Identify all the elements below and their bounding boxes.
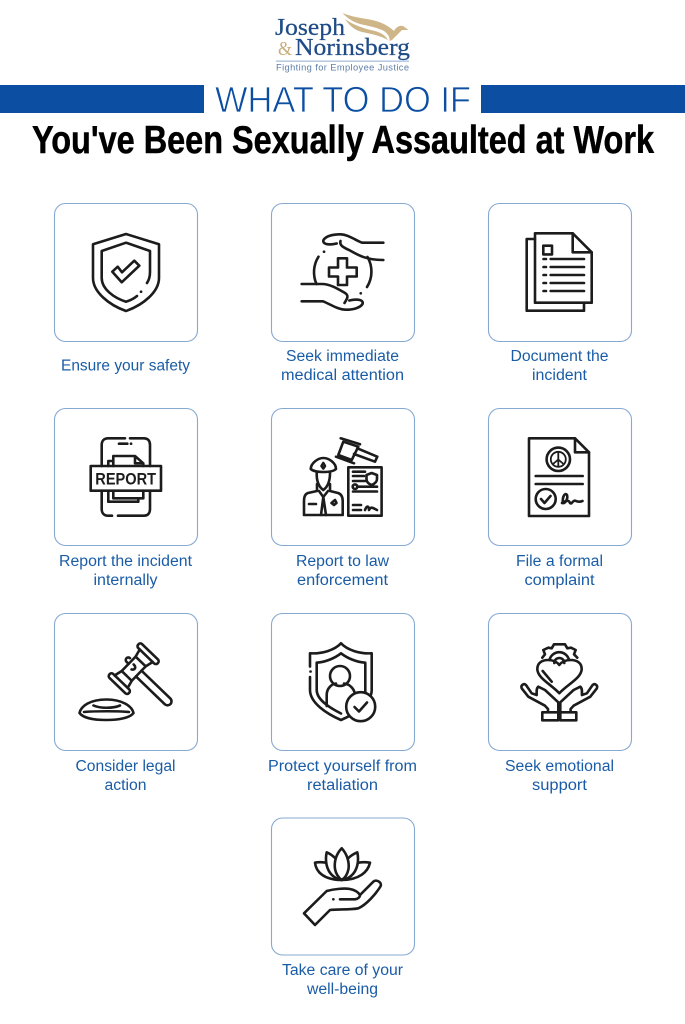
panel: file a formal complaint	[488, 408, 632, 589]
logo wordmark: Norinsberg	[295, 34, 410, 61]
icon: lotus over open hand	[304, 848, 381, 925]
label: Ensure your safety	[61, 358, 190, 375]
panel: report the incident internally	[54, 408, 198, 589]
label	[282, 962, 403, 998]
icon: gavel and sound block	[80, 642, 187, 721]
label: complaint	[524, 572, 595, 589]
icon: shield with person and check	[310, 643, 375, 721]
right header bar	[481, 85, 685, 113]
logo wordmark: &	[278, 38, 292, 60]
logo: Joseph & Norinsberg	[275, 13, 410, 72]
label	[296, 553, 390, 589]
panel: seek emotional support	[488, 614, 632, 794]
label	[505, 758, 614, 794]
label: Seek immediate	[286, 348, 399, 365]
label: File a formal	[516, 553, 603, 570]
label: Report the incident	[59, 553, 193, 570]
panel: consider legal action	[54, 614, 198, 794]
logo wordmark	[275, 15, 410, 61]
icon: shield with check	[93, 234, 159, 311]
panel: seek immediate medical attention	[272, 204, 414, 384]
label: Report to law	[296, 553, 390, 570]
panel: ensure your safety	[54, 204, 198, 375]
label	[76, 758, 176, 794]
icon: police officer, gavel and document	[304, 438, 382, 516]
label: Take care of your	[282, 962, 403, 979]
label	[268, 758, 417, 794]
panel: document the incident	[488, 204, 632, 384]
label	[281, 348, 404, 384]
panel: take care of your well-being	[272, 818, 414, 998]
label: Consider legal	[76, 758, 176, 775]
logo tagline: Fighting for Employee Justice	[276, 62, 409, 72]
label: action	[104, 777, 146, 794]
label: incident	[532, 367, 588, 384]
label: support	[532, 777, 588, 794]
heading: what to do if: WHAT TO DO IF	[215, 79, 471, 120]
logo bird	[342, 13, 408, 41]
label: enforcement	[297, 572, 389, 589]
panel: protect yourself from retaliation	[268, 614, 417, 794]
label: internally	[94, 572, 158, 589]
label	[516, 553, 603, 589]
label: retaliation	[307, 777, 378, 794]
label: Document the	[510, 348, 608, 365]
logo wordmark: Joseph	[275, 15, 345, 41]
icon: phone with report banner	[91, 438, 161, 516]
panel: report to law enforcement	[272, 408, 414, 589]
label: Protect yourself from	[268, 758, 417, 775]
label: well-being	[306, 981, 378, 998]
icon: heart and gear in hands	[521, 644, 597, 720]
label	[59, 553, 193, 589]
label: Seek emotional	[505, 758, 614, 775]
icon text: report: REPORT	[95, 470, 156, 488]
left header bar	[0, 85, 204, 113]
icon: stacked documents	[527, 233, 592, 311]
icon: complaint document	[529, 438, 589, 516]
icon: hands around medical cross	[302, 234, 383, 310]
label	[510, 348, 608, 384]
label: medical attention	[281, 367, 404, 384]
